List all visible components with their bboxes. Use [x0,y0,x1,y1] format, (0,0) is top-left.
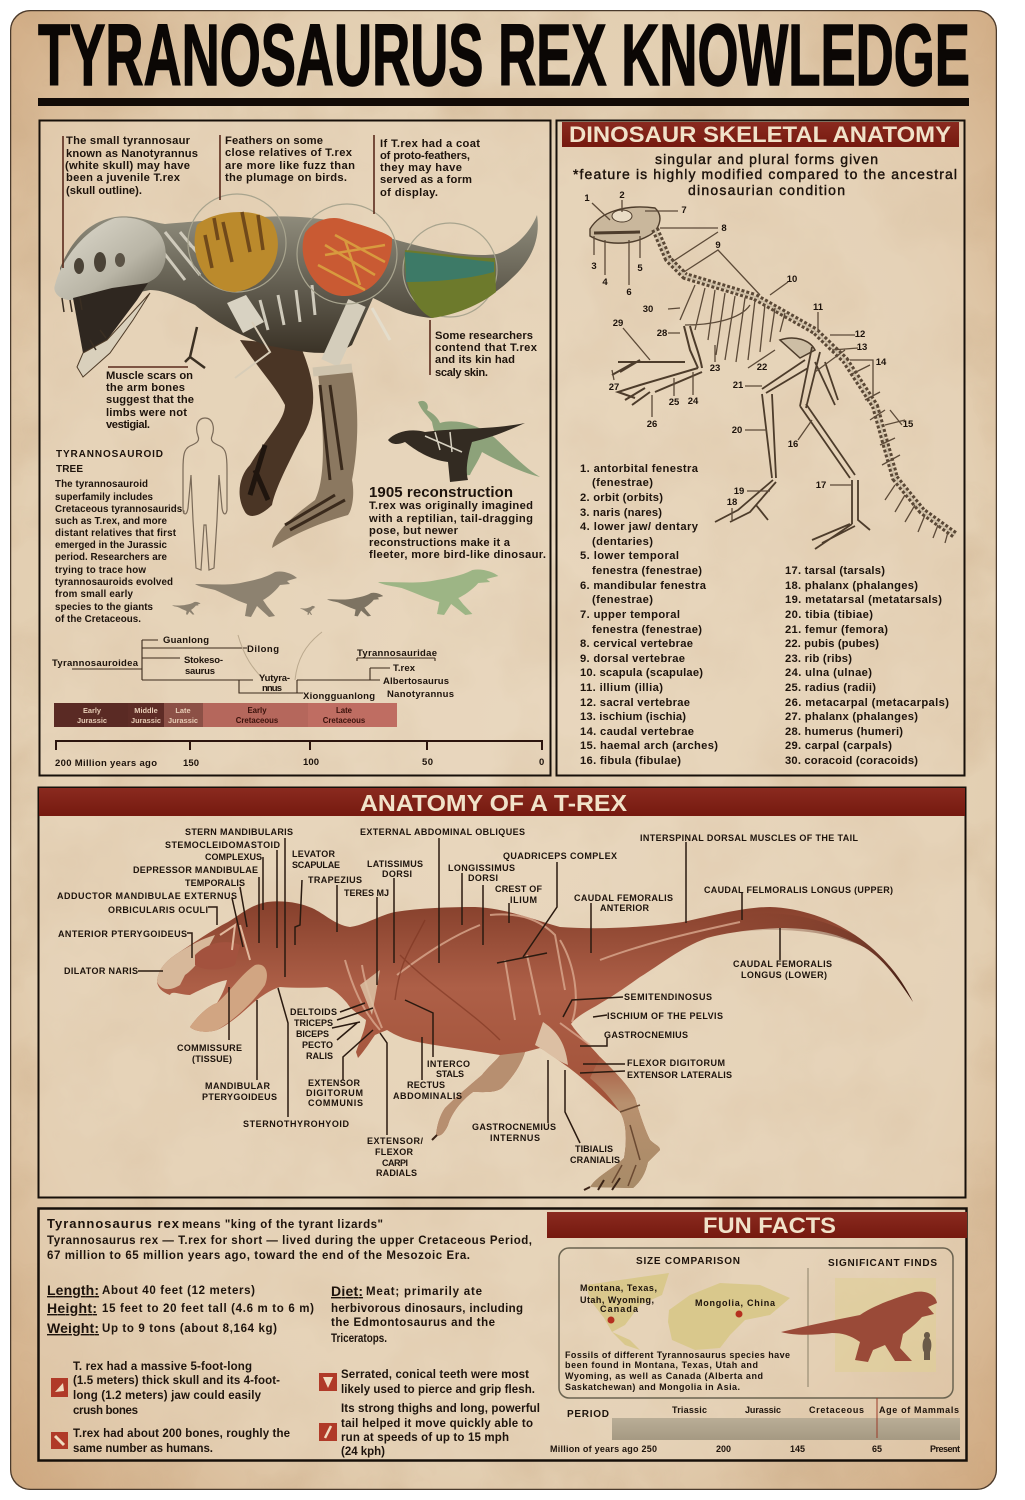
muscle labels: EXTERNAL ABDOMINAL OBLIQUES [360,827,525,837]
chart: time axis: 200 Million years ago [55,758,157,769]
skeleton number callouts: 8 [721,223,727,234]
chart: phylogenetic tree: T.rex [393,663,416,674]
callout: feathers [220,135,355,200]
skeleton number callouts: 30 [643,304,653,315]
muscle labels: CAUDAL FEMORALIS [574,893,673,903]
muscle labels: TEMPORALIS [185,878,245,888]
legend: bones 1–16: 3. naris (nares) [580,507,662,519]
legend: bones 1–16: 6. mandibular fenestra [580,580,707,592]
intro text: Tyrannosaurus rex — T.rex for short — lived during the upper Cretaceous Period, [47,1235,532,1247]
muscle labels: EXTENSOR [308,1078,360,1088]
callout: feathers: the plumage on birds. [225,172,347,184]
skeleton number callouts: 2 [619,190,625,201]
chart: geological period bar: Early [247,706,267,715]
muscle labels: LONGUS (LOWER) [741,970,827,980]
text: Tyrannosauroid tree: emerged in the Jurassic [55,540,168,551]
fact: teeth: likely used to pierce and grip flesh. [341,1384,535,1396]
text: Tyrannosauroid tree: such as T.rex, and more [55,516,168,527]
muscle labels: ADDUCTOR MANDIBULAE EXTERNUS [57,891,237,901]
chart: geological period bar: Jurassic [168,716,198,725]
fact: thighs and tail: Its strong thighs and long, powerful [341,1403,540,1415]
skeleton number callouts: 9 [715,240,721,251]
muscle labels: RADIALS [376,1168,417,1178]
muscle labels [57,827,893,1178]
fact: skull and jaw: T. rex had a massive 5-foot-long [73,1361,252,1373]
legend: bones 17–30: 23. rib (ribs) [785,653,852,665]
subheading: *feature is highly modified compared to the ancestral [573,166,957,182]
callout: scaly skin: and its kin had [435,354,515,366]
map: Canada [600,1304,639,1314]
text: Tyrannosauroid tree: Cretaceous tyrannosaurids, [55,504,185,515]
skeleton number callouts: 16 [788,439,798,450]
chart: geological period bar: Late [336,706,353,715]
legend: bones 17–30: 30. coracoid (coracoids) [785,755,918,767]
muscle labels: EXTENSOR LATERALIS [627,1070,732,1080]
fact: skull and jaw: long (1.2 meters) jaw could easily [73,1390,262,1402]
chart: geological periods timeline: Jurassic [745,1405,781,1415]
stats: diet [331,1283,523,1345]
chart: geological periods timeline: 65 [872,1444,882,1454]
text: Tyrannosauroid tree [55,449,185,625]
stats: diet: Diet: [331,1283,363,1299]
legend: bones 17–30 [785,565,949,767]
legend: bones 17–30: 25. radius (radii) [785,682,876,694]
callout: Nanotyrannus: known as Nanotyrannus [66,148,198,160]
legend: bones 17–30: 26. metacarpal (metacarpals) [785,697,949,709]
stats: diet: the Edmontosaurus and the [331,1317,495,1329]
muscle labels: ANTERIOR [600,903,650,913]
muscle labels: COMPLEXUS [205,852,262,862]
illustration: T. rex with skin patches [54,194,538,548]
chart: phylogenetic tree: Tyrannosauridae [357,648,437,659]
muscle labels: ILIUM [510,895,537,905]
header: anatomy [39,788,965,816]
muscle labels: PTERYGOIDEUS [202,1092,277,1102]
map [580,1273,790,1350]
skeleton number callouts: 22 [757,362,767,373]
panel: size comparison and finds: SIZE COMPARISON [636,1256,740,1267]
stats: length, height, weight: About 40 feet (12 meters) [102,1285,255,1297]
muscle labels: PECTO [302,1040,333,1050]
text: fossils: Fossils of different Tyrannosaurus species have [565,1350,790,1360]
icon: human scale figure [183,418,227,570]
header: fun facts: FUN FACTS [703,1213,836,1238]
chart: phylogenetic tree: Albertosaurus [383,676,449,687]
header: skeletal anatomy: DINOSAUR SKELETAL ANATOMY [569,122,951,147]
text: 1905 reconstruction: 1905 reconstruction [369,484,513,501]
muscle labels: LONGISSIMUS [448,863,515,873]
callout: scaly skin: Some researchers [435,330,533,342]
legend: bones 1–16: 11. illium (illia) [580,682,663,694]
muscle labels: CREST OF [495,884,542,894]
stats: length, height, weight: Length: [47,1282,99,1298]
chart: geological period bar: Late [175,706,191,715]
panel: size comparison and finds: SIGNIFICANT FINDS [828,1258,937,1269]
chart: geological period bar: Middle [134,706,158,715]
skeleton number callouts: 12 [855,329,865,340]
callout: feathers: Feathers on some [225,135,323,147]
skeleton number callouts: 28 [657,328,667,339]
chart: time axis: 0 [539,757,544,768]
legend: bones 1–16: (fenestrae) [592,477,653,489]
chart: phylogenetic tree: Dilong [247,644,279,655]
legend: bones 1–16: 12. sacral vertebrae [580,697,690,709]
stats: length, height, weight: Height: [47,1300,97,1316]
chart: geological period bar: Cretaceous [236,716,279,725]
muscle labels: DORSI [382,869,412,879]
skeleton number callouts: 27 [609,382,619,393]
text: 1905 reconstruction: pose, but newer [369,525,459,537]
chart: geological periods timeline: Present [930,1444,960,1454]
legend: bones 17–30: 22. pubis (pubes) [785,638,879,650]
muscle labels: DEPRESSOR MANDIBULAE [133,865,258,875]
muscle labels: LEVATOR [292,849,336,859]
legend: bones 17–30: 20. tibia (tibiae) [785,609,873,621]
stats: length, height, weight [47,1282,314,1336]
legend: bones 17–30: 24. ulna (ulnae) [785,667,872,679]
fact: skull and jaw: (1.5 meters) thick skull and its 4-foot- [73,1375,280,1387]
chart: geological periods timeline: Million of years ago 250 [550,1444,657,1454]
fact: skull and jaw [51,1361,280,1417]
muscle labels: SEMITENDINOSUS [624,992,712,1002]
muscle labels: LATISSIMUS [367,859,423,869]
skeleton number callouts: 23 [710,363,720,374]
stats: diet: herbivorous dinosaurs, including [331,1303,523,1315]
muscle labels: CAUDAL FELMORALIS LONGUS (UPPER) [704,885,893,895]
intro text: Tyrannosaurus rex [47,1216,180,1231]
text: Tyrannosauroid tree: from small early [55,589,134,600]
muscle labels: QUADRICEPS COMPLEX [503,851,617,861]
muscle labels: EXTENSOR/ [367,1136,423,1146]
legend: bones 17–30: 17. tarsal (tarsals) [785,565,885,577]
callout: Nanotyrannus [63,135,198,268]
chart: geological periods timeline: Cretaceous [809,1405,864,1415]
muscle labels: TRICEPS [294,1018,333,1028]
callout: scaly skin: scaly skin. [435,367,488,379]
legend: bones 17–30: 28. humerus (humeri) [785,726,903,738]
muscle labels: STERNOTHYROHYOID [243,1119,350,1129]
muscle labels: DORSI [468,873,498,883]
fact: bones: same number as humans. [73,1443,213,1455]
skeleton number callouts [584,190,914,520]
panel: Dinosaur skeletal anatomy [556,120,964,776]
muscle labels: COMMISSURE [177,1043,242,1053]
chart: phylogenetic tree: Guanlong [163,635,209,646]
callout: proto-feathers: If T.rex had a coat [380,138,480,150]
skeleton number callouts: 24 [688,396,699,407]
intro text: means "king of the tyrant lizards" [182,1219,383,1231]
skeleton number callouts: 26 [647,419,657,430]
skeleton number callouts: 21 [733,380,744,391]
skeleton number callouts: 15 [903,419,914,430]
muscle labels: SCAPULAE [292,860,340,870]
skeleton number callouts: 6 [626,287,632,298]
chart: phylogenetic tree: nnus [262,683,282,694]
fact: thighs and tail: tail helped it move quickly able to [341,1418,533,1430]
legend: bones 1–16: 2. orbit (orbits) [580,492,663,504]
muscle labels: DILATOR NARIS [64,966,138,976]
chart: geological period bar [54,703,397,727]
muscle labels: ANTERIOR PTERYGOIDEUS [58,929,187,939]
callout: feathers: close relatives of T.rex [225,147,353,159]
skeleton number callouts: 19 [734,486,744,497]
muscle labels: COMMUNIS [308,1098,363,1108]
legend: bones 17–30: 19. metatarsal (metatarsals) [785,594,942,606]
text: fossils: Saskatchewan) and Mongolia in Asia. [565,1382,740,1392]
chart: geological period bar: Cretaceous [323,716,366,725]
chart: geological periods timeline: Triassic [672,1405,707,1415]
skeleton number callouts: 14 [876,357,887,368]
icons: tyrannosauroid size silhouettes [172,569,498,617]
map: Mongolia, China [695,1298,776,1308]
chart: phylogenetic tree [52,632,454,702]
skeleton number callouts: 11 [813,302,824,313]
fact: thighs and tail: run at speeds of up to 15 mph [341,1432,509,1444]
legend: bones 17–30: 18. phalanx (phalanges) [785,580,918,592]
legend: bones 1–16: 10. scapula (scapulae) [580,667,703,679]
fact: teeth: Serrated, conical teeth were most [341,1369,529,1381]
text: Tyrannosauroid tree: distant relatives that first [55,528,177,539]
muscle labels: BICEPS [296,1029,329,1039]
skeleton number callouts: 25 [669,397,680,408]
text: Tyrannosauroid tree: superfamily includes [55,492,154,503]
legend: bones 17–30: 21. femur (femora) [785,624,888,636]
muscle labels: (TISSUE) [192,1054,232,1064]
callout: Nanotyrannus: The small tyrannosaur [66,135,191,147]
legend: bones 1–16 [580,463,718,767]
text: 1905 reconstruction: fleeter, more bird-like dinosaur. [369,549,546,561]
muscle labels: TIBIALIS [575,1144,613,1154]
fact: thighs and tail [319,1403,540,1458]
stats: diet: Meat; primarily ate [366,1286,482,1298]
text: Tyrannosauroid tree: TYRANNOSAUROID [56,449,163,460]
callout: arm muscle scars: limbs were not [106,407,187,419]
callout: proto-feathers: of display. [380,187,438,199]
muscle labels: RECTUS [407,1080,445,1090]
fact: thighs and tail: (24 kph) [341,1446,385,1458]
map: Montana, Texas, [580,1283,657,1293]
legend: bones 1–16: 1. antorbital fenestra [580,463,699,475]
legend: bones 1–16: 5. lower temporal [580,550,679,562]
skeleton number callouts: 4 [602,277,608,288]
muscle labels: TRAPEZIUS [308,875,362,885]
callout: arm muscle scars: suggest that the [106,394,194,406]
panel: Anatomy of a T-Rex [38,788,966,1198]
skeleton number callouts: 13 [857,342,867,353]
callout: Nanotyrannus: (white skull) may have [65,160,190,172]
legend: bones 1–16: 8. cervical vertebrae [580,638,693,650]
muscle labels: GASTROCNEMIUS [604,1030,688,1040]
legend: bones 1–16: 16. fibula (fibulae) [580,755,681,767]
subheading [573,151,957,198]
text: 1905 reconstruction: reconstructions make it a [369,537,511,549]
intro text [47,1216,532,1262]
skeleton number callouts: 1 [584,193,590,204]
stats: diet: Triceratops. [331,1333,387,1345]
title rule [38,98,969,106]
subheading: singular and plural forms given [655,151,878,167]
muscle labels: INTERNUS [490,1133,540,1143]
muscle labels: DELTOIDS [290,1007,337,1017]
text: 1905 reconstruction: with a reptilian, tail-dragging [368,513,533,525]
text: fossils: been found in Montana, Texas, Utah and [565,1360,758,1370]
legend: bones 1–16: 13. ischium (ischia) [580,711,686,723]
illustration: muscled T. rex [157,901,913,1190]
chart: geological period bar: Jurassic [131,716,161,725]
panel: key facts [38,1208,967,1460]
text: fossils [565,1350,790,1392]
text: 1905 reconstruction [368,484,546,561]
skeleton number callouts: 3 [591,261,597,272]
fact: skull and jaw: crush bones [73,1405,138,1417]
muscle labels: INTERCO [427,1059,470,1069]
chart: time axis [55,741,544,769]
skeleton number callouts: 7 [681,205,687,216]
chart: phylogenetic tree: Nanotyrannus [387,689,454,700]
illustration: dinosaur skeleton [590,207,955,549]
muscle labels: TERES MJ [344,888,389,898]
muscle labels: STERN MANDIBULARIS [185,827,293,837]
legend: bones 1–16: fenestra (fenestrae) [592,624,702,636]
muscle labels: CAUDAL FEMORALIS [733,959,832,969]
text: Tyrannosauroid tree: of the Cretaceous. [55,614,141,625]
callout: arm muscle scars: vestigial. [106,419,150,431]
chart: geological periods timeline [550,1398,960,1454]
muscle labels: RALIS [306,1051,333,1061]
chart: geological periods timeline: Age of Mammals [879,1405,959,1415]
text: fossils: Wyoming, as well as Canada (Alberta and [565,1371,763,1381]
legend: bones 1–16: (fenestrae) [592,594,653,606]
chart: time axis: 150 [183,758,199,769]
muscle labels: ISCHIUM OF THE PELVIS [607,1011,723,1021]
chart: phylogenetic tree: Tyrannosauroidea [52,658,139,669]
illustration: 1905 reconstruction [388,401,540,482]
muscle labels: CRANIALIS [570,1155,620,1165]
legend: bones 17–30: 29. carpal (carpals) [785,740,892,752]
text: 1905 reconstruction: T.rex was originally imagined [369,500,533,512]
text: Tyrannosauroid tree: tyrannosauroids evolved [55,577,173,588]
header: fun facts [547,1212,967,1238]
skeleton number callouts: 18 [727,497,737,508]
muscle labels: ORBICULARIS OCULI [108,905,208,915]
callout: proto-feathers: they may have [380,162,462,174]
text: Tyrannosauroid tree: species to the giants [55,602,154,613]
header: anatomy: ANATOMY OF A T-REX [360,790,628,816]
skeleton number callouts: 17 [816,480,826,491]
map: Utah, Wyoming, [580,1295,654,1305]
callout: proto-feathers [374,135,480,214]
chart: geological period bar: Jurassic [77,716,107,725]
skeleton number callouts: 20 [732,425,742,436]
skeleton number callouts: 29 [613,318,623,329]
legend: bones 1–16: 7. upper temporal [580,609,680,621]
leader lines [138,838,780,1143]
chart: geological periods timeline: 200 [716,1444,731,1454]
callout: Nanotyrannus: been a juvenile T.rex [66,172,181,184]
callout: scaly skin [430,320,538,379]
muscle labels: MANDIBULAR [205,1081,270,1091]
legend: bones 1–16: 15. haemal arch (arches) [580,740,718,752]
panel: T. rex overview [40,120,550,776]
callout: feathers: are more like fuzz than [225,160,355,172]
muscle labels: INTERSPINAL DORSAL MUSCLES OF THE TAIL [640,833,858,843]
illustration: T. rex size silhouette and human [781,1278,937,1372]
chart: phylogenetic tree: saurus [185,666,215,677]
legend: bones 1–16: (dentaries) [592,536,653,548]
callout: scaly skin: contend that T.rex [435,342,538,354]
chart: geological periods timeline: 145 [790,1444,805,1454]
chart: phylogenetic tree: Stokeso- [184,655,223,666]
chart: time axis: 100 [303,757,319,768]
stats: length, height, weight: Weight: [47,1320,99,1336]
chart: phylogenetic tree: Xiongguanlong [303,691,375,702]
callout: arm muscle scars: Muscle scars on [106,370,193,382]
muscle labels: CARPI [382,1158,408,1168]
text: Tyrannosauroid tree: The tyrannosauroid [55,479,148,490]
callout: proto-feathers: of proto-feathers, [380,150,470,162]
muscle labels: FLEXOR [375,1147,414,1157]
text: Tyrannosauroid tree: period. Researchers are [55,552,168,563]
legend: bones 1–16: 14. caudal vertebrae [580,726,694,738]
legend: bones 1–16: 4. lower jaw/ dentary [580,521,699,533]
muscle labels: ABDOMINALIS [393,1091,462,1101]
muscle labels: GASTROCNEMIUS [472,1122,556,1132]
muscle labels: FLEXOR DIGITORUM [627,1058,725,1068]
stats: length, height, weight: Up to 9 tons (about 8,164 kg) [102,1323,277,1335]
muscle labels: STEMOCLEIDOMASTOID [165,840,280,850]
fact: bones [51,1428,290,1455]
legend: bones 1–16: fenestra (fenestrae) [592,565,702,577]
muscle labels: STALS [436,1069,464,1079]
chart: geological periods timeline: PERIOD [567,1409,609,1420]
fact: teeth [319,1369,535,1396]
callout: arm muscle scars: the arm bones [106,382,185,394]
text: Tyrannosauroid tree: TREE [56,464,83,475]
muscle labels: DIGITORUM [306,1088,363,1098]
legend: bones 17–30: 27. phalanx (phalanges) [785,711,918,723]
intro text: 67 million to 65 million years ago, toward the end of the Mesozoic Era. [47,1250,470,1262]
text: Tyrannosauroid tree: trying to trace how [55,565,146,576]
chart: geological period bar: Early [83,706,102,715]
skeleton number callouts: 10 [787,274,797,285]
legend: bones 1–16: 9. dorsal vertebrae [580,653,685,665]
panel: size comparison and finds [559,1248,953,1398]
subheading: dinosaurian condition [688,182,845,198]
skeleton number callouts: 5 [637,263,643,274]
callout: Nanotyrannus: (skull outline). [66,185,142,197]
chart: time axis: 50 [422,757,433,768]
stats: length, height, weight: 15 feet to 20 feet tall (4.6 m to 6 m) [102,1303,314,1315]
callout: proto-feathers: served as a form [380,174,472,186]
chart: phylogenetic tree: Yutyra- [259,673,290,684]
fact: bones: T.rex had about 200 bones, roughly the [73,1428,290,1440]
callout: arm muscle scars [106,367,194,431]
